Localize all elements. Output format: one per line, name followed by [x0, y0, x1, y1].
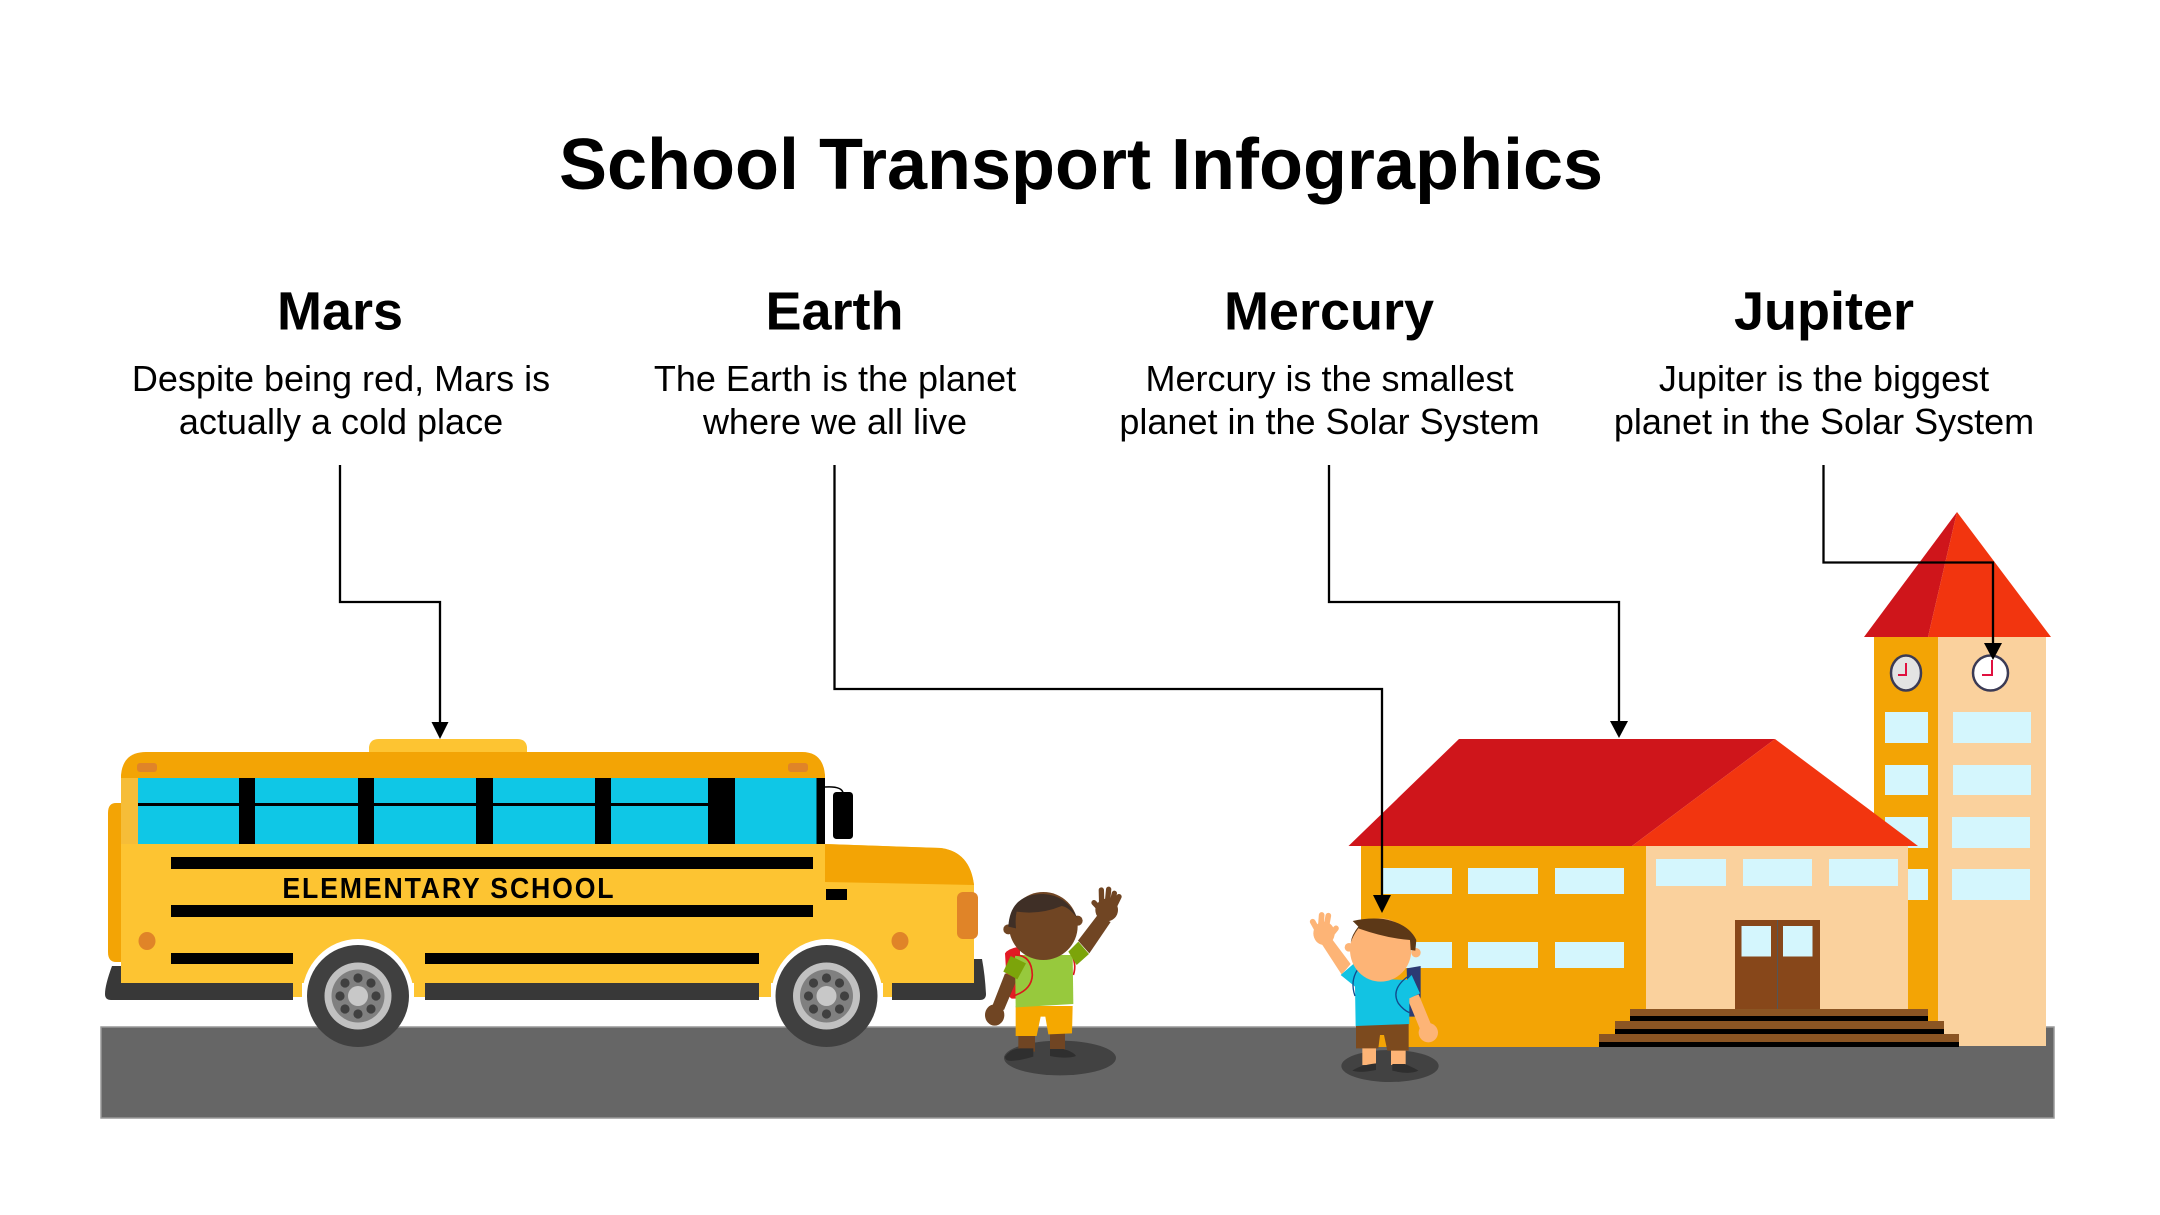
- clock: left: [1891, 656, 1921, 690]
- arrow: Jupiter to clock: [1824, 465, 2002, 660]
- bus rear panel: [108, 803, 121, 962]
- bus roof lights: [137, 763, 808, 772]
- text block: Mars: Mars: [277, 282, 403, 342]
- arrow: Mars to bus: [340, 465, 448, 739]
- child: blue shirt: [1313, 915, 1439, 1082]
- text block: Jupiter: [1614, 282, 2034, 442]
- text block: Mercury: Mercury: [1224, 282, 1434, 342]
- bus roof hatch: [369, 739, 527, 752]
- bus hood: [825, 844, 974, 885]
- school building: [1348, 512, 2051, 1047]
- text block: Mars: [132, 282, 550, 442]
- text block: Earth: where we all live: [702, 401, 967, 442]
- bus roof: [121, 752, 825, 778]
- text block: Mercury: Mercury is the smallest: [1145, 358, 1514, 399]
- text block: Mars: Despite being red, Mars is: [132, 358, 550, 399]
- bus label: ELEMENTARY SCHOOL: [282, 872, 614, 904]
- school bus: [105, 739, 986, 1047]
- bumpers: [105, 959, 986, 1000]
- steps: [1599, 1009, 1959, 1047]
- text block: Jupiter: Jupiter is the biggest: [1659, 358, 1989, 399]
- child: green shirt: [985, 889, 1119, 1075]
- text block: Mercury: planet in the Solar System: [1119, 401, 1540, 442]
- lights: [138, 892, 978, 950]
- wheel: rear: [302, 939, 414, 1047]
- door: [1735, 920, 1820, 1009]
- title: School Transport Infographics: [559, 125, 1603, 205]
- text block: Earth: The Earth is the planet: [654, 358, 1016, 399]
- arrow: Earth to child: [834, 465, 1391, 913]
- windows: [1382, 859, 1898, 968]
- left wing: [1361, 846, 1646, 1047]
- text block: Jupiter: planet in the Solar System: [1614, 401, 2034, 442]
- arrow: Mercury to school: [1329, 465, 1628, 738]
- bus body: [121, 778, 974, 997]
- windows: [138, 778, 825, 844]
- stripes: [171, 857, 847, 964]
- main roof: [1348, 739, 1918, 846]
- text block: Earth: [654, 282, 1016, 442]
- text block: Mars: actually a cold place: [179, 401, 503, 442]
- mirror: [825, 787, 853, 839]
- text block: Earth: Earth: [765, 282, 904, 342]
- text block: Jupiter: Jupiter: [1734, 282, 1914, 342]
- wheel: front: [771, 939, 883, 1047]
- clock: right: [1973, 656, 2008, 690]
- clock tower: [1864, 512, 2051, 1046]
- road: [101, 1027, 2054, 1118]
- text block: Mercury: [1119, 282, 1540, 442]
- right wing: [1646, 846, 1908, 1009]
